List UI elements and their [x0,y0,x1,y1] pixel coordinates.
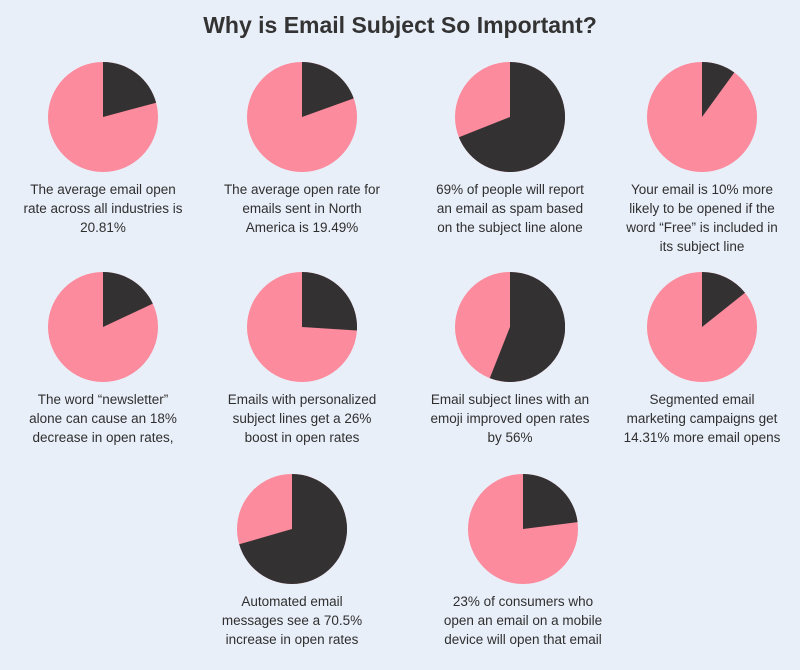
caption 2: The average open rate for [224,182,380,197]
pie chart 5 [48,272,158,382]
caption 9 [222,594,362,647]
caption 4: its subject line [660,239,744,254]
caption 3: 69% of people will report [436,182,584,197]
pie chart 8 [647,272,757,382]
pie chart 7 [455,272,565,382]
caption 1: rate across all industries is [23,201,183,216]
caption 2: America is 19.49% [246,220,358,235]
caption 5: alone can cause an 18% [29,411,177,426]
caption 8 [624,392,780,445]
caption 4: word “Free” is included in [626,220,778,235]
caption 5: The word “newsletter” [38,392,168,407]
caption 9: messages see a 70.5% [222,613,362,628]
pie chart 4 [647,62,757,172]
caption 10: device will open that email [444,632,602,647]
caption 5: decrease in open rates, [32,430,174,445]
pie chart 3 [455,62,565,172]
panel: stat 1 [23,62,183,235]
panel: stat 7 [430,272,590,445]
caption 3 [436,182,584,235]
caption 9: Automated email [241,594,343,609]
panel: stat 10 [444,474,602,647]
caption 10: 23% of consumers who [453,594,593,609]
pie chart 6 [247,272,357,382]
panel: stat 5 [29,272,177,445]
caption 6: boost in open rates [245,430,359,445]
caption 9: increase in open rates [226,632,358,647]
panel: stat 4 [626,62,778,254]
panel: stat 9 [222,474,362,647]
caption 2: emails sent in North [242,201,362,216]
caption 3: an email as spam based [437,201,583,216]
caption 1: 20.81% [80,220,126,235]
caption 1 [23,182,183,235]
caption 8: marketing campaigns get [627,411,777,426]
caption 4 [626,182,778,254]
caption 4: likely to be opened if the [629,201,775,216]
caption 6: subject lines get a 26% [233,411,371,426]
pie chart 9 [237,474,347,584]
pie chart 2 [247,62,357,172]
caption 10 [444,594,602,647]
caption 7: emoji improved open rates [430,411,590,426]
caption 1: The average email open [30,182,176,197]
panel: stat 6 [228,272,376,445]
caption 5 [29,392,177,445]
caption 7 [430,392,590,445]
caption 3: on the subject line alone [437,220,583,235]
panel: stat 3 [436,62,584,235]
caption 7: by 56% [487,430,533,445]
caption 6 [228,392,376,445]
caption 8: Segmented email [649,392,755,407]
caption 4: Your email is 10% more [631,182,773,197]
panel: stat 8 [624,272,780,445]
caption 10: open an email on a mobile [444,613,602,628]
pie chart 10 [468,474,578,584]
pie chart 1 [48,62,158,172]
caption 2 [224,182,380,235]
panel: stat 2 [224,62,380,235]
caption 7: Email subject lines with an [431,392,589,407]
caption 8: 14.31% more email opens [624,430,780,445]
title: Why is Email Subject So Important? [203,12,597,38]
caption 6: Emails with personalized [228,392,376,407]
